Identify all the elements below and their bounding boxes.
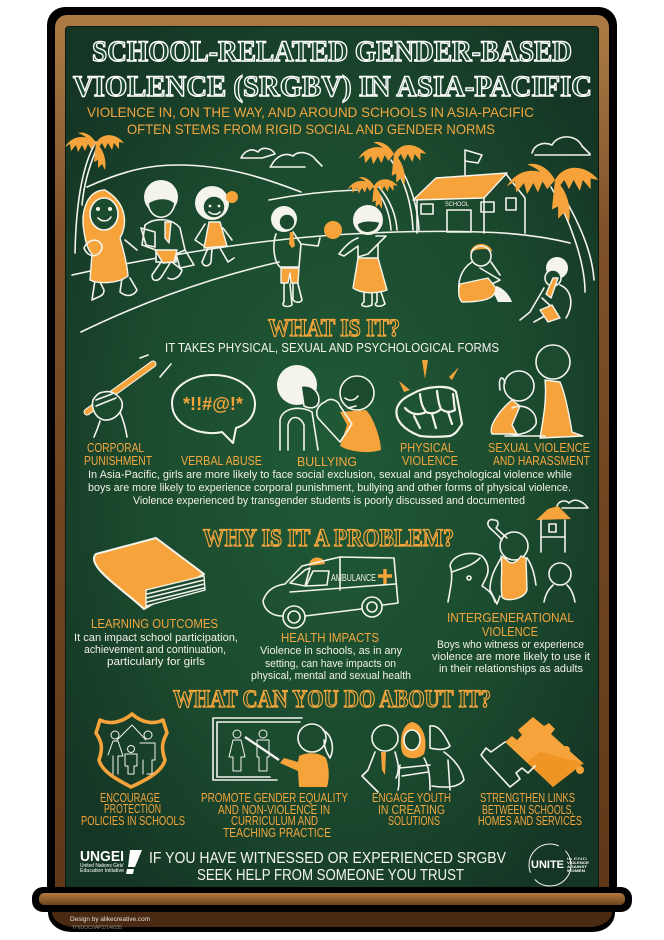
labels: forms of violence: BULLYING [297, 455, 357, 469]
school building [413, 150, 525, 233]
seated girl reading [459, 244, 512, 302]
labels: actions: POLICIES IN SCHOOLS [81, 814, 185, 828]
icon: speech bubble [172, 375, 255, 443]
icon: youth group [362, 722, 464, 792]
icon: sexual violence figures [491, 345, 583, 438]
title: VIOLENCE (SRGBV) IN ASIA-PACIFIC [73, 70, 592, 103]
paragraph: gender differences: boys are more likely to experience corporal punishment, bullying and other forms of physical violence. [88, 482, 571, 494]
subtitle: OFTEN STEMS FROM RIGID SOCIAL AND GENDER NORMS [127, 121, 495, 137]
icon: teacher at board [213, 718, 332, 787]
intergenerational violence text: INTERGENERATIONAL [447, 611, 574, 625]
labels: forms of violence: SEXUAL VIOLENCE [488, 441, 590, 455]
logo: UNGEI: Education Initiative [80, 868, 124, 874]
labels: actions: HOMES AND SERVICES [478, 814, 582, 828]
intergenerational violence text: violence are more likely to use it [432, 651, 590, 663]
learning outcomes text: achievement and continuation, [84, 644, 226, 656]
credit line: TH/DOC/IAP2/14/035 [72, 925, 122, 931]
learning outcomes text: particularly for girls [107, 656, 206, 668]
heading: what can you do about it: WHAT CAN YOU DO ABOUT IT? [173, 686, 491, 713]
learning outcomes text [74, 617, 238, 668]
left palm tree [65, 132, 124, 253]
labels: actions: CURRICULUM AND [231, 814, 318, 828]
paragraph: gender differences [88, 469, 572, 507]
labels: actions: AND NON-VIOLENCE IN [218, 803, 330, 817]
labels: actions: ENGAGE YOUTH [372, 791, 451, 805]
girl in hijab [83, 190, 137, 300]
call to action: IF YOU HAVE WITNESSED OR EXPERIENCED SRGBV [149, 850, 506, 867]
labels: actions: PROTECTION [104, 802, 161, 816]
labels: actions: STRENGTHEN LINKS [480, 791, 575, 805]
credit line [70, 916, 150, 931]
paragraph: gender differences: Violence experienced by transgender students is poorly discussed and documented [133, 495, 525, 507]
health impacts text: setting, can have impacts on [265, 658, 396, 670]
house on stilts [536, 500, 588, 552]
call to action: SEEK HELP FROM SOMEONE YOU TRUST [197, 867, 464, 884]
logo: UNITE [529, 844, 589, 886]
icon: ambulance: AMBULANCE [331, 573, 376, 584]
right palm tree [507, 164, 598, 292]
centre palm trees [348, 142, 426, 230]
girl with bow [195, 186, 238, 266]
clouds [241, 137, 590, 167]
call to action [149, 850, 506, 884]
icon: intergenerational family [448, 500, 588, 604]
intergenerational violence text: Boys who witness or experience [437, 639, 584, 651]
labels: forms of violence: VERBAL ABUSE [181, 454, 262, 468]
labels: actions: IN CREATING [378, 803, 445, 817]
labels: actions: TEACHING PRACTICE [223, 826, 331, 840]
title [73, 35, 592, 103]
heading: what is it: WHAT IS IT? [268, 315, 400, 342]
chalk tray and base [32, 887, 632, 932]
paragraph: gender differences: In Asia-Pacific, girls are more likely to face social exclusion, sexual and psychological violence while [88, 469, 572, 481]
icon: raised stick [87, 355, 171, 437]
icon: speech bubble: *!!#@!* [183, 394, 243, 414]
labels: actions: PROMOTE GENDER EQUALITY [201, 791, 349, 805]
hills and road [72, 165, 570, 332]
boy with backpack [141, 180, 194, 280]
icon: bullying figures [277, 365, 381, 452]
labels: forms of violence: VIOLENCE [402, 454, 458, 468]
learning outcomes text: LEARNING OUTCOMES [91, 617, 218, 631]
intergenerational violence text: in their relationships as adults [439, 663, 583, 675]
illustration: school yard scene [65, 132, 598, 332]
health impacts text: HEALTH IMPACTS [281, 631, 379, 645]
health impacts text: physical, mental and sexual health [251, 670, 411, 682]
boy with ball [271, 206, 320, 306]
labels: forms of violence: PHYSICAL [400, 441, 454, 455]
labels: forms of violence [84, 441, 590, 469]
labels: forms of violence: CORPORAL [87, 441, 144, 455]
labels: forms of violence: AND HARASSMENT [493, 454, 590, 468]
icon: book [94, 538, 205, 609]
logo: UNGEI: United Nations Girls' [80, 863, 124, 869]
heading: why is it a problem: WHY IS IT A PROBLEM? [203, 525, 454, 552]
subtitle [87, 104, 534, 137]
intergenerational violence text [432, 611, 590, 675]
learning outcomes text: It can impact school participation, [74, 632, 238, 644]
logo: UNGEI [80, 848, 142, 874]
labels: forms of violence: PUNISHMENT [84, 454, 152, 468]
seated boy reading [520, 257, 571, 322]
school building: SCHOOL [445, 201, 469, 208]
icon: jigsaw puzzle [481, 717, 584, 787]
icon: ambulance [263, 557, 398, 628]
labels: actions [81, 791, 582, 840]
icon: protection shield [96, 714, 167, 787]
icon: fist [396, 360, 462, 437]
subtitle: VIOLENCE IN, ON THE WAY, AND AROUND SCHOOLS IN ASIA-PACIFIC [87, 104, 534, 120]
subheading: forms: IT TAKES PHYSICAL, SEXUAL AND PSYCHOLOGICAL FORMS [165, 341, 499, 355]
logo: UNGEI: UNGEI [80, 848, 124, 865]
credit line: Design by alikecreative.com [70, 916, 150, 923]
logo: UNITE: WOMEN [567, 868, 585, 873]
logo: UNITE: AGAINST [567, 864, 588, 869]
labels: actions: ENCOURAGE [100, 791, 160, 805]
logo: UNITE: to END [567, 856, 587, 861]
labels: actions: BETWEEN SCHOOLS, [482, 803, 574, 817]
intergenerational violence text: VIOLENCE [482, 625, 538, 639]
labels: actions: SOLUTIONS [388, 814, 440, 828]
logo: UNITE: VIOLENCE [567, 860, 589, 865]
health impacts text: Violence in schools, as in any [260, 645, 402, 657]
logo: UNITE: UNITE [531, 859, 564, 871]
girl with skirt [339, 205, 387, 306]
health impacts text [251, 631, 411, 682]
title: SCHOOL-RELATED GENDER-BASED [92, 35, 572, 68]
ball [324, 221, 342, 239]
